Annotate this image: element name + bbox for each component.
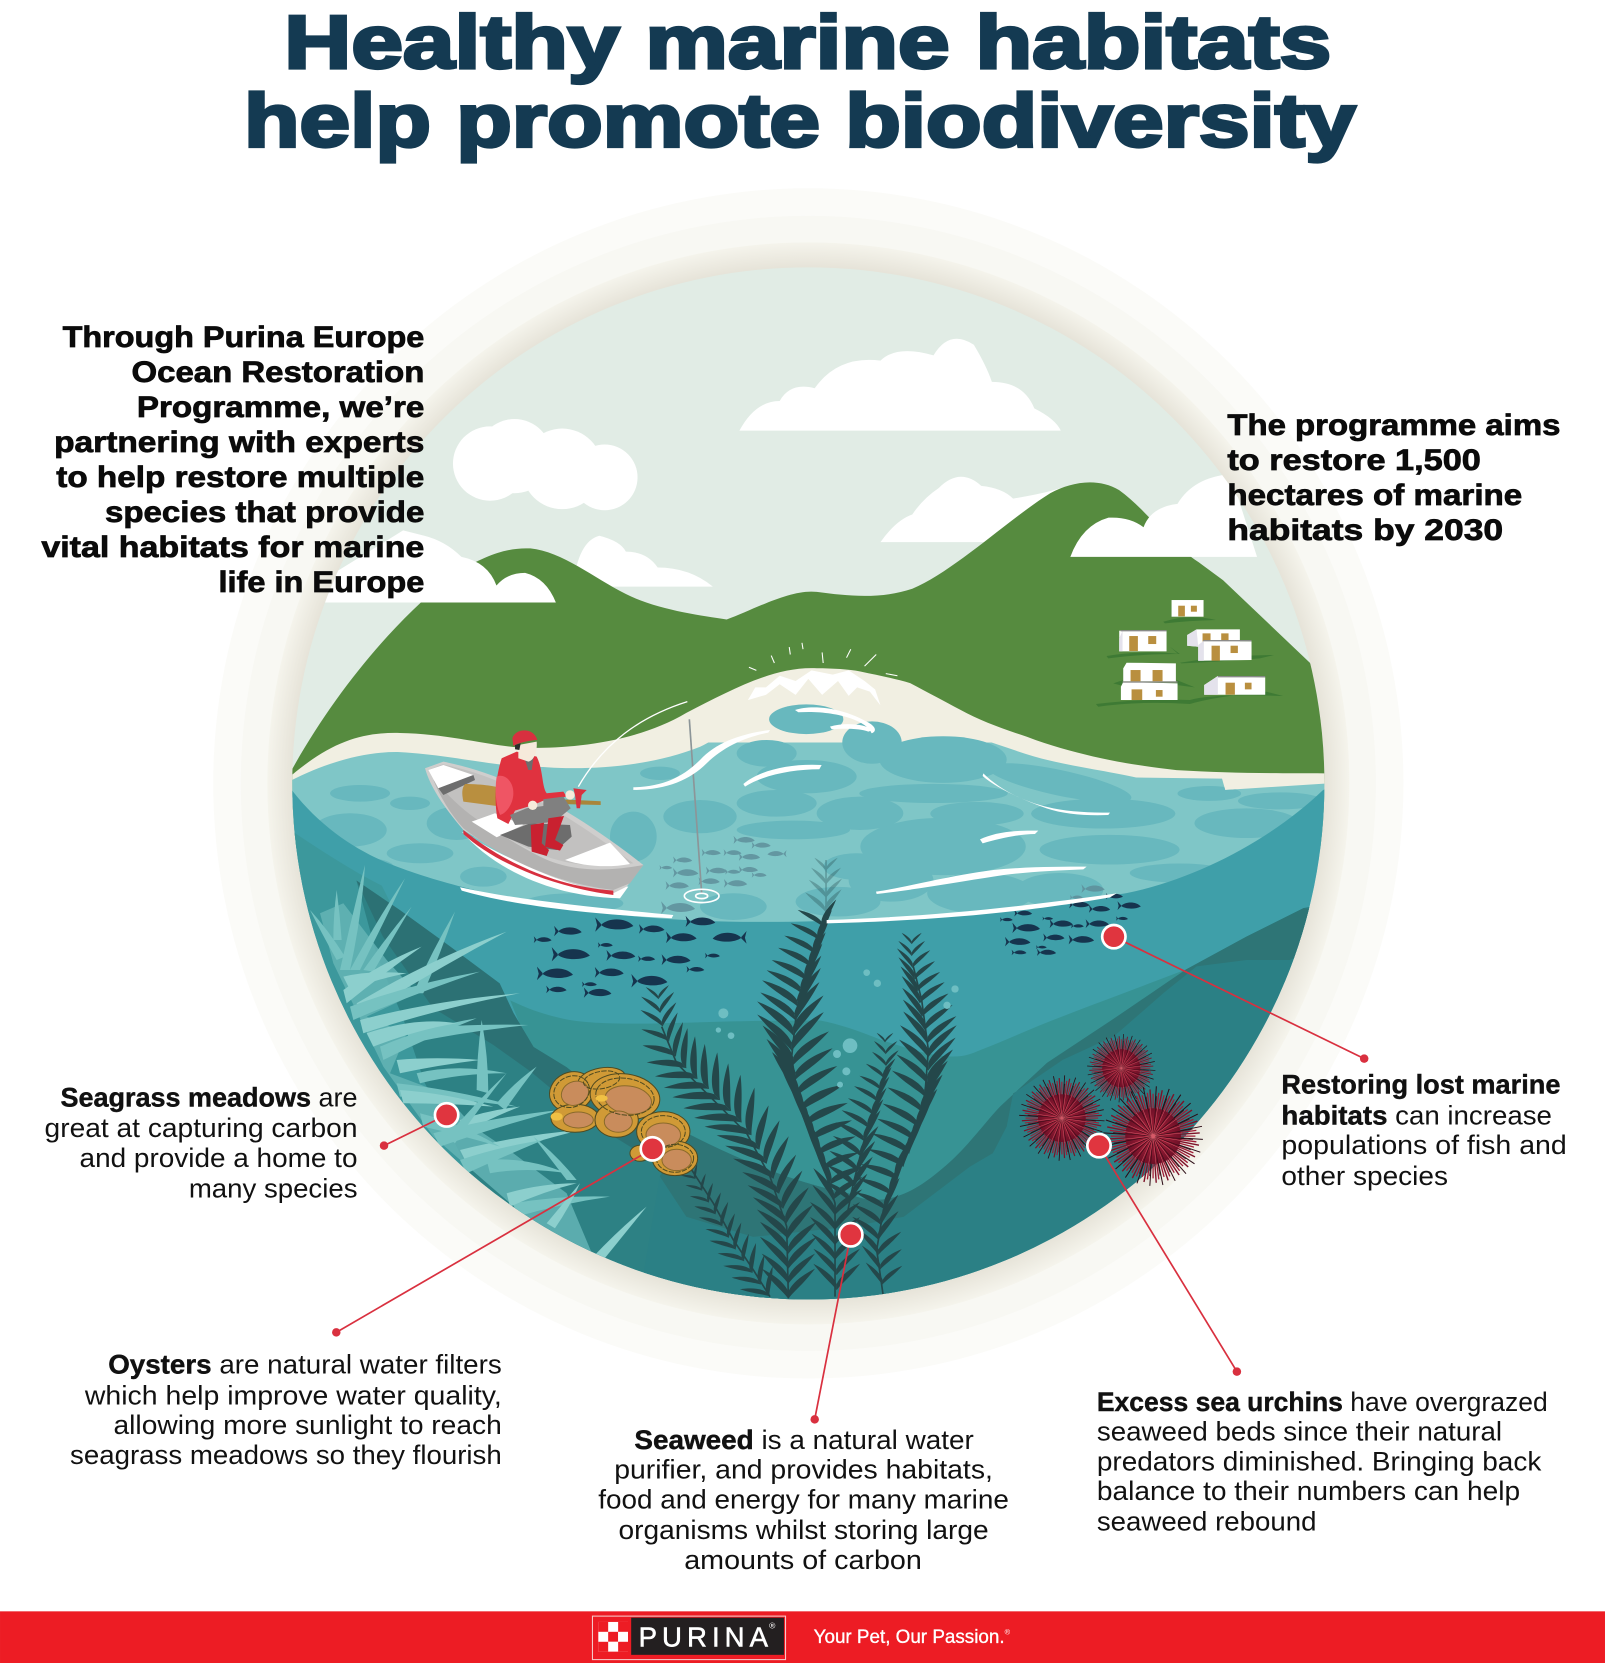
sea surface [286,704,1337,933]
text block: programme aim: habitats by 2030 [1227,514,1503,547]
title [244,0,1356,162]
text block: seaweed: purifier, and provides habitats, [614,1455,993,1485]
text block: sea urchins: seaweed beds since their natural [1097,1417,1502,1447]
cloud: left over mountain [325,530,556,602]
callout: restoring habitats pointer [1102,925,1368,1063]
text block: programme aim: hectares of marine [1227,479,1522,512]
wave crests centre [460,707,875,918]
oar bag [462,784,503,806]
text block: sea urchins [1097,1387,1548,1537]
surface cells left [313,740,903,920]
seabed ridge [660,908,1326,1237]
wave crests right [827,773,1117,923]
title: help promote biodiversity [244,78,1356,162]
cloud: right over mountain [1070,474,1257,557]
text block: sea urchins: predators diminished. Bringing back [1097,1446,1542,1476]
boat hull [425,762,643,893]
text block: restoring habitats: Restoring lost marine [1281,1070,1560,1100]
text block: restoring habitats [1281,1070,1567,1191]
house 2 [1119,630,1167,651]
logo: Purina [592,1616,786,1660]
bubbles [716,969,959,1088]
text block: oysters: seagrass meadows so they flourish [70,1440,502,1470]
logo: Purina: ® [769,1620,776,1630]
callout: seaweed pointer [810,1223,862,1424]
frond: middle [825,1033,899,1205]
text block: sea urchins: seaweed rebound [1097,1507,1316,1537]
seabed right and bottom [636,902,1337,1315]
house 6 [1121,681,1178,700]
text block: programme intro: vital habitats for marine [41,531,424,564]
text block: sea urchins: balance to their numbers can help [1097,1476,1520,1506]
text block: programme intro: Programme, we’re [137,391,424,424]
tagline: Your Pet, Our Passion. [814,1626,1005,1648]
seaweed fronds [640,858,957,1308]
text block: seagrass: Seagrass meadows are [60,1082,357,1112]
sea urchin left [1015,1071,1109,1165]
fisherman [496,752,567,824]
logo: Purina: PURINA [639,1621,769,1652]
houses [1096,600,1283,707]
cloud: top centre [739,339,1061,431]
text block: programme intro: species that provide [105,496,424,529]
frond: main tip above surface [805,858,843,922]
text block: programme intro [41,321,424,599]
title: Healthy marine habitats [284,0,1331,84]
cloud: small by left mountain [573,536,713,587]
text block: seagrass: and provide a home to [80,1143,357,1173]
fish school right [1000,893,1141,956]
text block: oysters: which help improve water quality, [84,1380,502,1410]
text block: programme intro: life in Europe [219,566,424,599]
house 5 [1123,663,1176,681]
text block: programme intro: Through Purina Europe [63,321,424,354]
frond: left [640,985,817,1299]
text block: restoring habitats: other species [1281,1161,1448,1191]
footer bar [0,1611,1605,1663]
underwater [286,783,1337,1315]
beach [286,668,1337,806]
text block: seagrass: great at capturing carbon [45,1113,357,1143]
text block: programme aim [1227,409,1560,547]
text block: programme aim: The programme aims [1227,409,1560,442]
text block: seagrass [45,1082,357,1204]
text block: programme intro: Ocean Restoration [132,356,424,389]
tagline: ® [1005,1628,1011,1637]
text block: seaweed: Seaweed is a natural water [634,1425,974,1455]
house 1 [1172,600,1204,617]
frond: right [852,933,957,1286]
text block: oysters: Oysters are natural water filters [108,1350,502,1380]
oysters [543,1064,698,1176]
text block: seaweed: organisms whilst storing large [618,1515,989,1545]
text block: programme intro: to help restore multiple [56,461,424,494]
text block: sea urchins: Excess sea urchins have overgrazed [1097,1387,1548,1417]
fishing line and bobber [684,719,719,903]
left water near rim [294,833,552,1232]
seabed dark strip [356,880,640,1148]
surface cells right [769,704,1323,917]
fish school grey over surface [660,836,1105,914]
fish school dark [534,916,747,998]
wave foam at peak [748,670,880,705]
text block: oysters [70,1350,502,1470]
cloud: left blob [453,419,638,510]
sea urchin large [1098,1081,1208,1191]
text block: programme intro: partnering with experts [54,426,424,459]
frond: main [757,900,865,1290]
boat wake [462,832,628,898]
mountains [286,482,1331,849]
panel: ocean scene circle [286,265,1337,1315]
sea urchin small [1084,1030,1159,1106]
fishing boat and fisherman [425,702,687,898]
text block: seaweed: amounts of carbon [684,1545,922,1575]
text block: restoring habitats: habitats can increase [1281,1100,1552,1130]
house 7 [1204,676,1265,695]
panel: concentric rings [213,188,1403,1378]
fishing rod [578,702,687,787]
deeper water band [510,912,1337,1315]
seagrass meadow [310,865,647,1260]
text block: programme aim: to restore 1,500 [1227,444,1481,477]
text block: restoring habitats: populations of fish and [1281,1130,1567,1160]
cloud: behind right mountain [880,477,1061,542]
callout: urchins pointer [1087,1134,1241,1376]
boat interior [428,764,633,866]
house 4 [1198,640,1252,661]
callout: oysters pointer [332,1137,664,1337]
text block: seaweed: food and energy for many marine [598,1484,1009,1514]
text block: seaweed [598,1425,1009,1575]
house 3 [1187,629,1240,647]
text block: oysters: allowing more sunlight to reach [114,1410,502,1440]
seabed lower left [356,880,806,1315]
text block: seagrass: many species [189,1174,357,1204]
frond: lower left [681,1164,786,1308]
callout: seagrass pointer [380,1103,458,1150]
spray lines [749,643,897,676]
